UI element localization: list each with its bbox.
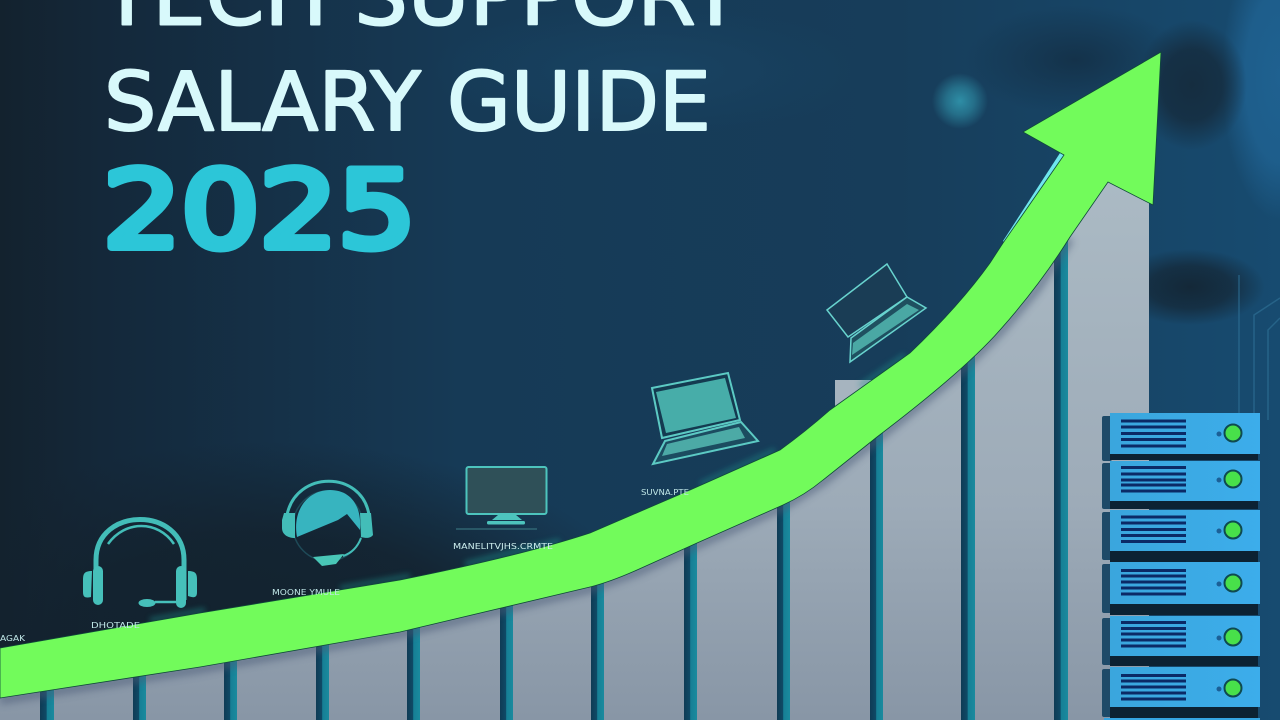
bar top stub [835, 380, 875, 420]
icon: support agent [282, 481, 373, 566]
title [100, 0, 742, 272]
server unit 7 [1104, 718, 1260, 720]
tier label: support agent: MOONE YMULE [272, 588, 340, 597]
tier label: entry: AGAK [0, 634, 26, 643]
server unit 2 [1102, 461, 1260, 509]
tier label: headset: DHOTADE [91, 621, 140, 630]
icon: desktop monitor [456, 467, 546, 529]
server unit 1 [1102, 413, 1260, 461]
icon: headset outline [83, 520, 197, 608]
title line: salary guide: SALARY GUIDE [104, 56, 711, 150]
bars [0, 170, 1149, 720]
server rack [1102, 413, 1260, 720]
tier label: laptop: SUVNA.PTE [641, 488, 689, 497]
arrow shadow on bars [0, 239, 1070, 700]
title line: year: 2025 [103, 149, 416, 272]
circuit lines [1239, 275, 1280, 420]
server unit 5 [1102, 616, 1260, 666]
bar chart [0, 170, 1149, 720]
icon: laptop [652, 373, 758, 464]
arrow highlight [1003, 153, 1066, 250]
bar gaps [40, 200, 1068, 720]
glow along arrow [150, 355, 905, 620]
icon: tilted laptop [827, 264, 926, 362]
server unit 4 [1102, 562, 1260, 615]
server unit 3 [1102, 510, 1260, 562]
server unit 6 [1102, 667, 1260, 718]
tier label: desktop: MANELITVJHS.CRMTE [453, 542, 553, 551]
